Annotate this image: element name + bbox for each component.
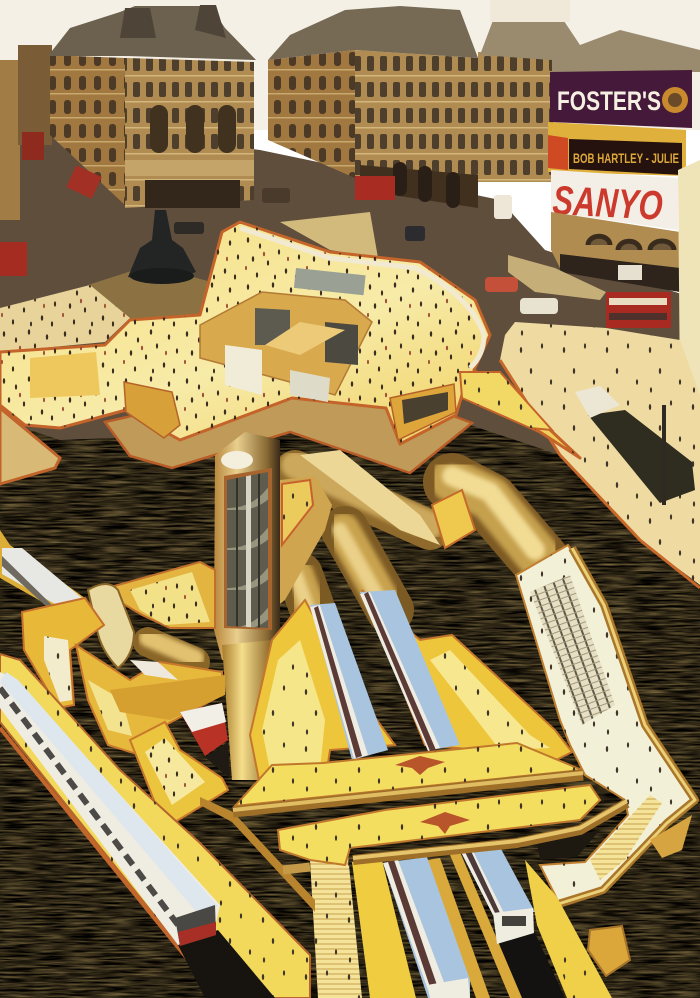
sign: Bob Hartley ticker <box>569 139 682 175</box>
street: pavement top <box>280 212 378 258</box>
hall: central block of ticket offices <box>200 292 372 402</box>
left tunnels: gold tubes <box>88 584 195 668</box>
bus: right <box>606 292 671 328</box>
bus: rear left <box>66 165 102 199</box>
street: pavement under signs <box>508 255 606 300</box>
building: distant terrace left <box>0 45 52 220</box>
street: Eros island platform <box>88 265 240 320</box>
street: vehicles <box>0 165 671 328</box>
left tunnels: stepped junction rooms <box>22 598 225 760</box>
train body <box>0 672 220 945</box>
street: pavement right with crowd <box>500 322 700 588</box>
background: underground earth <box>0 400 700 998</box>
left tunnels: waiting room <box>100 562 215 628</box>
sign: Foster's: FOSTER'S <box>557 86 661 116</box>
track bed <box>178 930 275 998</box>
cross passage: upper <box>233 743 583 812</box>
hall: curved outer wall <box>240 228 484 368</box>
rail stub <box>283 867 310 870</box>
building base with arched windows and shops <box>551 212 680 292</box>
hall outer foot <box>650 815 692 858</box>
tube elbow <box>452 476 540 560</box>
lift shaft with spiral stair <box>214 432 280 780</box>
train B upper section <box>360 590 460 751</box>
building: rear block right <box>478 0 700 182</box>
building: central terrace block <box>268 6 478 208</box>
escalator banks <box>530 575 615 725</box>
platform edge <box>0 728 225 998</box>
street level: roads <box>0 120 700 585</box>
cross passage: lower <box>278 785 627 870</box>
hall outer wall tube <box>555 548 695 905</box>
tube down to train A <box>296 575 318 625</box>
cars <box>485 277 518 292</box>
platforms beside train B <box>362 590 572 762</box>
right platform lower <box>525 860 612 998</box>
stair and ramp below cross passages <box>310 855 416 998</box>
lower train A <box>383 857 470 998</box>
support strips between lower trains <box>427 852 522 998</box>
passage rail <box>233 775 583 812</box>
statue: Eros fountain <box>128 210 196 284</box>
street: pavement left <box>0 285 130 352</box>
sign: Foster's <box>550 70 692 128</box>
elbow crescent <box>88 584 134 668</box>
tube <box>295 465 430 530</box>
tube down to train B <box>340 530 390 610</box>
train windows <box>0 688 178 925</box>
concourse: main circular ticket hall <box>0 222 580 458</box>
train roof <box>0 672 218 916</box>
background: sky <box>0 0 700 130</box>
roundel roof mark <box>420 812 470 834</box>
left tunnels: train stub <box>0 530 85 612</box>
roundel roof mark <box>395 756 445 775</box>
building: County Fire Office corner block <box>48 5 256 208</box>
tube to shaft <box>148 638 195 662</box>
escalator hall stairs <box>590 795 662 880</box>
tunnel room: cut-away beside shaft <box>272 476 332 610</box>
diagonal beam left of stair <box>200 797 315 912</box>
track bed under train B <box>497 933 565 998</box>
bus: left edge <box>0 242 27 276</box>
sign: Sanyo: SANYO <box>552 177 664 229</box>
building: Piccadilly advertising signs <box>548 70 692 292</box>
concourse: right arm wedge <box>460 372 552 430</box>
bus: centre <box>355 176 395 200</box>
building: white column at right edge <box>678 160 700 395</box>
platforms around central trains <box>250 600 395 803</box>
train A upper section <box>310 603 388 760</box>
dark gap under lower passage <box>537 830 600 860</box>
sign: yellow band <box>548 122 686 176</box>
tunnels: upper gold passages to the right <box>295 450 540 625</box>
lower train B <box>460 847 535 944</box>
hall: glass kiosks <box>30 268 456 440</box>
sign: coke roundel panel <box>548 135 568 170</box>
escalator hall right <box>516 545 697 905</box>
left tunnels: lower hall <box>130 722 230 828</box>
left tunnels: red train end <box>130 660 228 756</box>
section cut highlights <box>300 450 440 545</box>
utility box lower right <box>588 926 630 976</box>
passage rail <box>353 803 627 860</box>
train end cab <box>175 905 216 946</box>
platform and long train left <box>0 654 310 998</box>
left wedge of street slab <box>0 408 60 484</box>
street: stairwell entrance <box>575 386 695 505</box>
concourse: lower slab <box>105 380 472 473</box>
